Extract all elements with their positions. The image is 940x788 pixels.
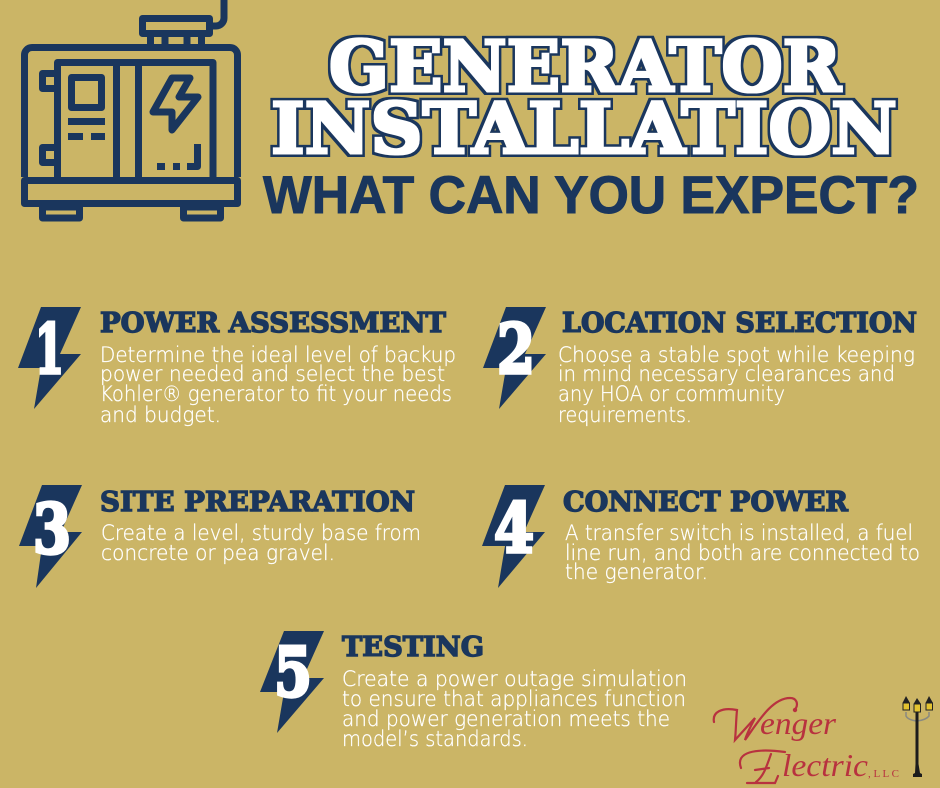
heading: CONNECT POWER [563,487,849,518]
text block [100,343,456,427]
panel: step 5 [260,631,687,751]
text block [558,343,915,427]
text block: Create a power outage simulation [342,667,687,691]
text block: line run, and both are connected to [565,541,920,565]
text block: model’s standards. [342,727,528,751]
number 5: 5 [274,633,312,713]
logo: Wenger Electric: lectric [782,747,868,783]
number 1: 1 [35,310,64,390]
text block: and budget. [100,403,221,427]
number 4: 4 [494,489,534,569]
heading: POWER ASSESSMENT [100,308,446,339]
text block: any HOA or community [558,382,785,406]
text block: Choose a stable spot while keeping [558,343,915,367]
text block [342,667,687,751]
heading: TESTING [342,632,484,663]
icon: lamp post [902,696,933,777]
logo: Wenger Electric [714,698,899,783]
heading: LOCATION SELECTION [562,308,917,339]
icon: lightning bolt 3 [19,485,82,588]
panel: step 3 [19,485,421,588]
number 3: 3 [33,490,71,570]
text block: and power generation meets the [342,707,670,731]
panel: step 4 [482,485,920,588]
logo: Wenger Electric: , L L C [868,768,899,780]
subtitle: WHAT CAN YOU EXPECT? [263,166,919,225]
text block: Create a level, sturdy base from [101,521,421,545]
icon: lightning bolt 5 [260,631,324,733]
text block: the generator. [565,560,708,584]
text block: A transfer switch is installed, a fuel [565,521,913,545]
text block: requirements. [558,403,692,427]
title: INSTALLATION [271,87,897,170]
text block: power needed and select the best [100,362,445,386]
icon: lightning bolt 4 [482,485,545,588]
text block [101,521,421,565]
text block: in mind necessary clearances and [558,362,895,386]
icon: lightning bolt 1 [18,307,81,409]
number 2: 2 [497,310,535,390]
text block: concrete or pea gravel. [101,541,335,565]
icon: lightning bolt 2 [483,307,546,409]
heading: SITE PREPARATION [100,487,415,518]
text block: Kohler® generator to fit your needs [100,382,452,406]
icon: generator [24,0,238,218]
panel: step 2 [483,307,917,427]
text block: to ensure that appliances function [342,687,686,711]
title [271,25,897,170]
text block [565,521,920,584]
text block: Determine the ideal level of backup [100,343,456,367]
title: GENERATOR [329,25,842,108]
logo: Wenger Electric: enger [760,705,837,741]
panel: step 1 [18,307,456,427]
